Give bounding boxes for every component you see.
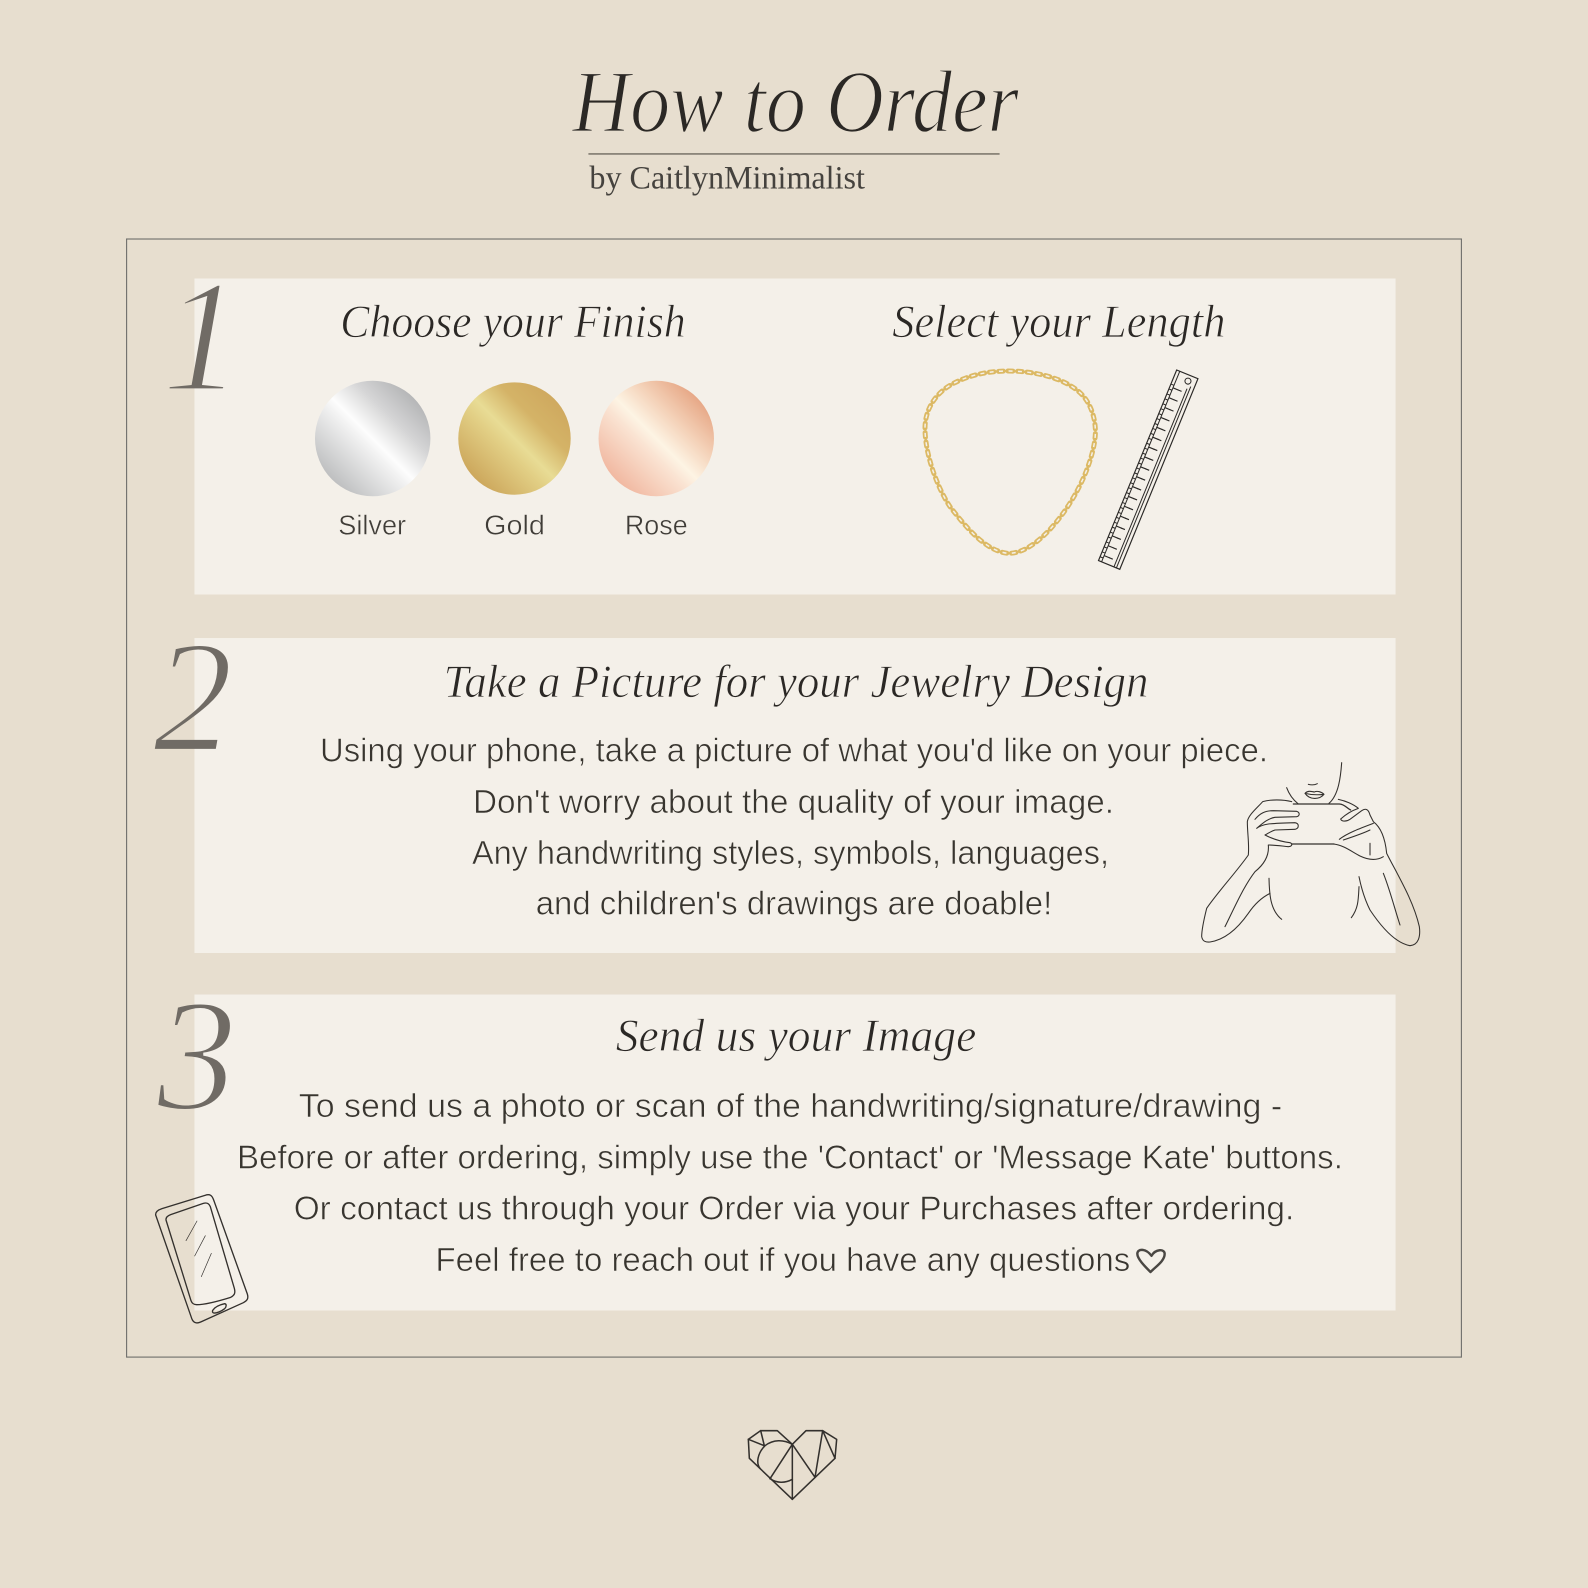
icon: gold chain necklace (925, 371, 1095, 553)
icon: smartphone (156, 1195, 248, 1323)
label: gold: Gold (484, 510, 545, 541)
number 1: 1 (162, 247, 242, 425)
text block: send instructions (237, 1088, 1343, 1279)
heading: select length: Select your Length (892, 296, 1225, 348)
icon: small heart (1137, 1250, 1165, 1272)
text block: picture instructions: Don't worry about the quality of your image. (473, 784, 1114, 821)
text block: send instructions: Feel free to reach out if you have any questions (435, 1242, 1130, 1279)
text block: send instructions: Before or after ordering, simply use the 'Contact' or 'Message Kate' buttons. (237, 1140, 1343, 1177)
panel: step 3 (194, 995, 1396, 1311)
text block: send instructions: To send us a photo or scan of the handwriting/signature/drawing - (299, 1088, 1282, 1125)
heading: take a picture: Take a Picture for your Jewelry Design (444, 656, 1148, 708)
number 3: 3 (156, 966, 237, 1144)
subtitle: by CaitlynMinimalist (589, 160, 865, 196)
panel: step 1 (194, 279, 1396, 594)
right arm and hand (1338, 799, 1420, 946)
logo: geometric heart (748, 1431, 837, 1499)
text block: send instructions: Or contact us through your Order via your Purchases after ordering. (294, 1190, 1294, 1227)
text block: picture instructions: Any handwriting styles, symbols, languages, (472, 835, 1109, 872)
text block: picture instructions: Using your phone, take a picture of what you'd like on your piece. (320, 733, 1268, 770)
label: rose: Rose (625, 510, 688, 541)
swatch: silver (315, 381, 430, 496)
text block: picture instructions (320, 733, 1268, 923)
icon: woman photographing with phone (1202, 763, 1420, 946)
heading: choose finish: Choose your Finish (340, 296, 686, 348)
panel: step 2 (194, 638, 1396, 953)
heading: send image: Send us your Image (616, 1010, 976, 1062)
swatch: gold (458, 382, 571, 495)
text block: picture instructions: and children's drawings are doable! (536, 886, 1052, 923)
outer frame (127, 239, 1461, 1357)
number 2: 2 (153, 607, 233, 785)
icon: ruler (1099, 370, 1198, 569)
title: How to Order (571, 54, 1019, 152)
swatch: rose (599, 381, 714, 496)
label: silver: Silver (338, 510, 406, 541)
left arm and hand (1202, 800, 1292, 942)
